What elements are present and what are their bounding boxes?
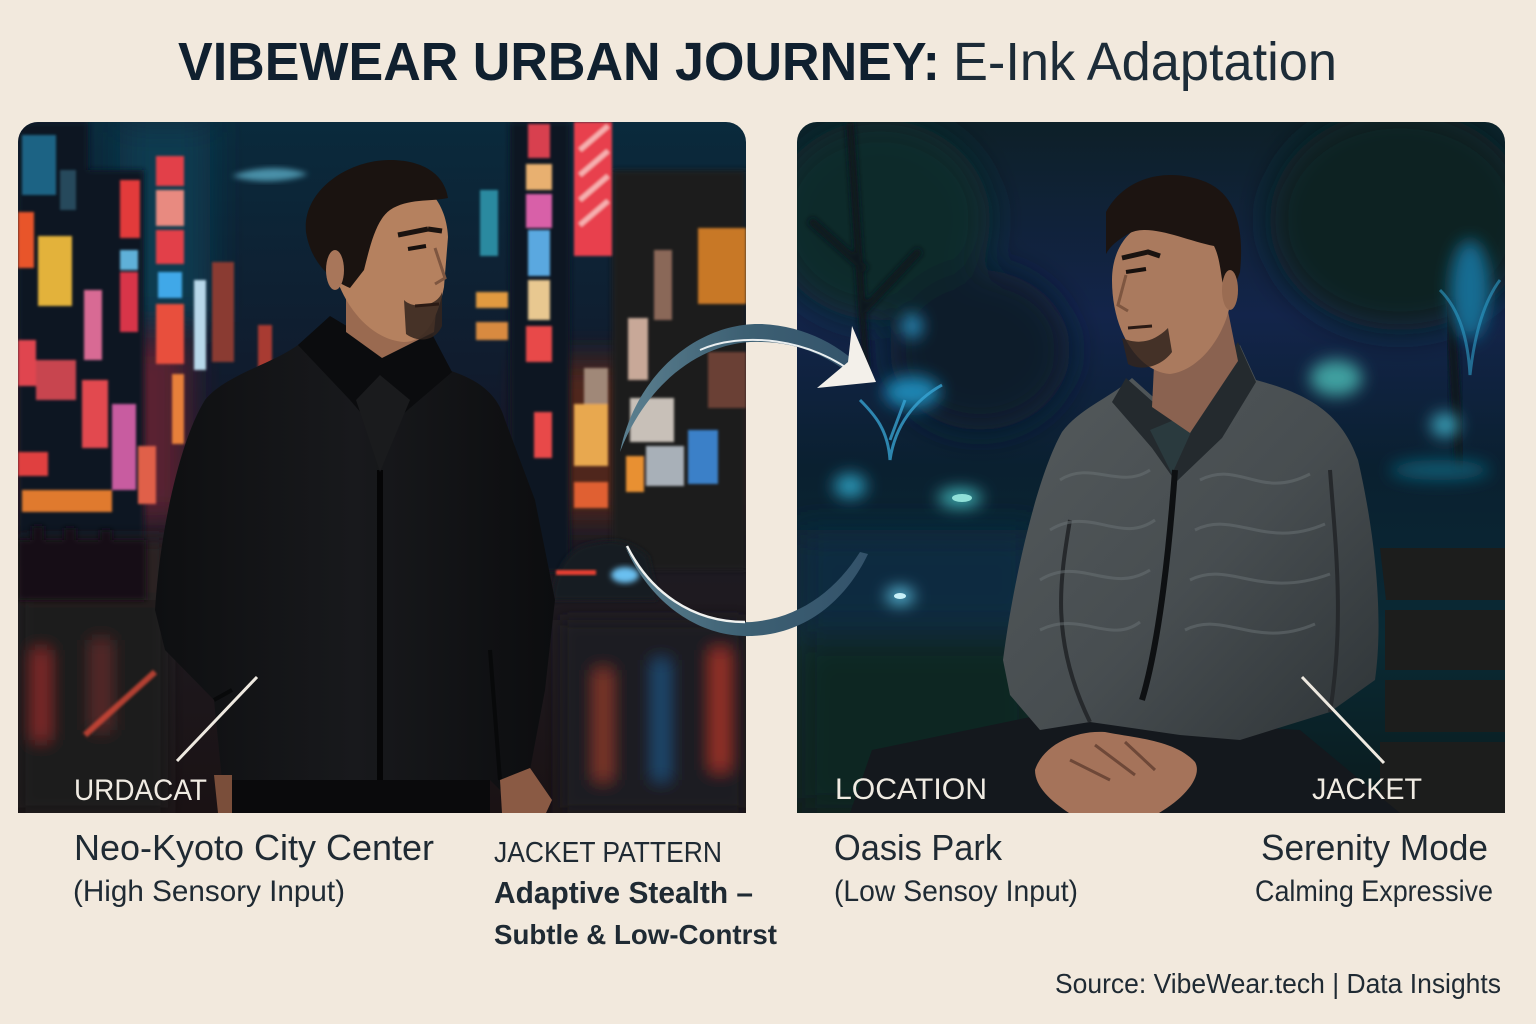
title: E-Ink Adaptation <box>953 32 1337 92</box>
face details <box>1122 252 1160 258</box>
label: URDACAT: URDACAT <box>74 774 207 807</box>
source note: Source: VibeWear.tech | Data Insights <box>1055 968 1501 999</box>
text block: jacket pattern: JACKET PATTERN <box>494 837 722 869</box>
title: VIBEWEAR URBAN JOURNEY: <box>178 32 940 92</box>
car <box>552 541 658 600</box>
face details <box>398 229 442 235</box>
man in grey jacket <box>850 175 1400 813</box>
building silhouettes <box>18 122 746 572</box>
text block: park location <box>834 827 1078 908</box>
text block: serenity mode: Calming Expressive <box>1255 875 1493 908</box>
crowd silhouettes <box>18 526 146 600</box>
text block: jacket pattern <box>494 837 777 950</box>
title <box>178 32 1337 92</box>
text block: city location <box>73 827 434 908</box>
text block: park location: (Low Sensoy Input) <box>834 875 1078 908</box>
text block: park location: Oasis Park <box>834 827 1003 868</box>
street glow and wet road <box>18 540 746 813</box>
text block: city location: Neo-Kyoto City Center <box>74 827 434 868</box>
panel: park photo <box>770 110 1530 813</box>
text block: city location: (High Sensory Input) <box>73 875 345 908</box>
label: LOCATION: LOCATION <box>835 773 987 806</box>
text block: jacket pattern: Adaptive Stealth – <box>494 875 753 910</box>
park bench <box>1380 548 1505 813</box>
city buildings and neon signs <box>18 122 746 813</box>
text block: serenity mode <box>1255 827 1493 908</box>
panel: city photo <box>18 122 746 813</box>
text block: serenity mode: Serenity Mode <box>1261 827 1488 868</box>
text block: jacket pattern: Subtle & Low-Contrst <box>494 919 777 950</box>
label: JACKET: JACKET <box>1312 773 1422 806</box>
man in black jacket <box>155 160 555 813</box>
callout line: left jacket <box>177 677 257 761</box>
trees and bioluminescent glow <box>770 110 1530 813</box>
callout line: right jacket <box>1302 677 1384 763</box>
arrow: cycle between scenes <box>620 324 876 636</box>
